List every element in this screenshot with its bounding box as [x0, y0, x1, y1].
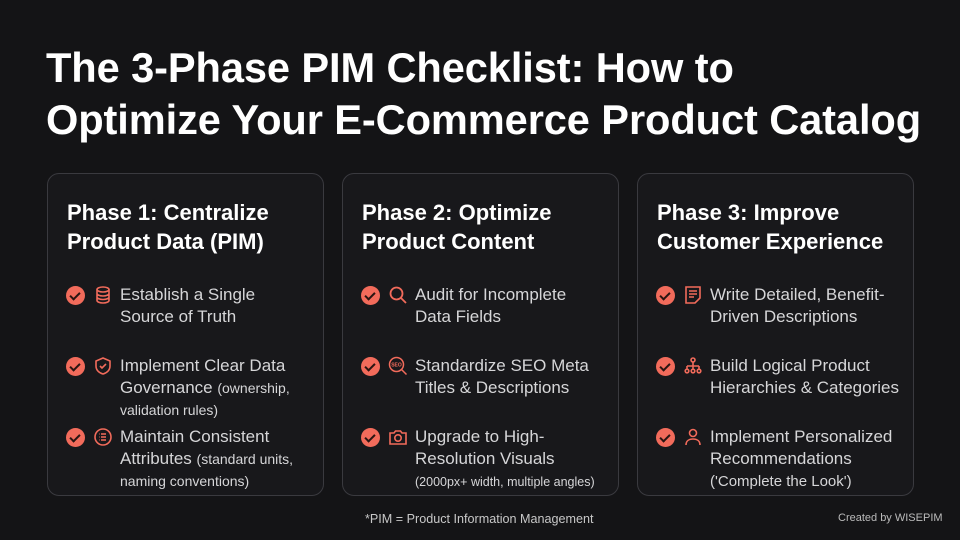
- item: hierarchies: Hierarchies & Categories: [710, 378, 899, 397]
- item: single source: Source of Truth: [120, 307, 236, 326]
- item: data governance: [66, 356, 290, 418]
- item: recommendations: Recommendations: [710, 449, 852, 468]
- item: consistent attributes: Attributes (standard units,: [120, 449, 293, 468]
- item: single source: Establish a Single: [120, 285, 255, 304]
- item: SEO: SEO: [391, 362, 402, 368]
- item: visuals: [361, 427, 595, 489]
- item: visuals: Upgrade to High-: [415, 427, 544, 446]
- item: single source: [66, 285, 255, 326]
- item: data governance: Governance (ownership,: [120, 378, 290, 397]
- item: hierarchies: Build Logical Product: [710, 356, 870, 375]
- item: visuals: (2000px+ width, multiple angles): [415, 475, 595, 489]
- heading: phase 3: Phase 3: Improve: [657, 200, 839, 225]
- item: data governance: Implement Clear Data: [120, 356, 285, 375]
- item: recommendations: ('Complete the Look'): [710, 473, 852, 490]
- title: The 3-Phase PIM Checklist: How to: [46, 44, 734, 91]
- panel: phase 1: [47, 173, 324, 496]
- heading: phase 3: Customer Experience: [657, 229, 883, 254]
- item: audit: Audit for Incomplete: [415, 285, 566, 304]
- heading: phase 1: [67, 200, 269, 254]
- panel: phase 2: [342, 173, 619, 496]
- heading: phase 2: [362, 200, 552, 254]
- item: hierarchies: [656, 356, 899, 397]
- title: [46, 44, 921, 143]
- item: SEO: Standardize SEO Meta: [415, 356, 589, 375]
- heading: phase 1: Phase 1: Centralize: [67, 200, 269, 225]
- panel: phase 3: [637, 173, 914, 496]
- heading: phase 3: [657, 200, 883, 254]
- item: recommendations: Implement Personalized: [710, 427, 892, 446]
- heading: phase 1: Product Data (PIM): [67, 229, 264, 254]
- item: SEO: [361, 356, 589, 397]
- item: audit: Data Fields: [415, 307, 501, 326]
- heading: phase 2: Phase 2: Optimize: [362, 200, 552, 225]
- item: descriptions: [656, 285, 884, 326]
- item: SEO: Titles & Descriptions: [415, 378, 569, 397]
- item: descriptions: Write Detailed, Benefit-: [710, 285, 884, 304]
- heading: phase 2: Product Content: [362, 229, 534, 254]
- title: Optimize Your E-Commerce Product Catalog: [46, 96, 921, 143]
- item: recommendations: [656, 427, 892, 490]
- item: consistent attributes: Maintain Consistent: [120, 427, 269, 446]
- item: consistent attributes: naming conventions): [120, 473, 249, 489]
- footnote: *PIM = Product Information Management: [365, 512, 594, 526]
- item: audit: [361, 285, 566, 326]
- item: data governance: validation rules): [120, 402, 218, 418]
- credit: Created by WISEPIM: [838, 512, 943, 524]
- item: consistent attributes: [66, 427, 293, 489]
- item: visuals: Resolution Visuals: [415, 449, 555, 468]
- item: descriptions: Driven Descriptions: [710, 307, 857, 326]
